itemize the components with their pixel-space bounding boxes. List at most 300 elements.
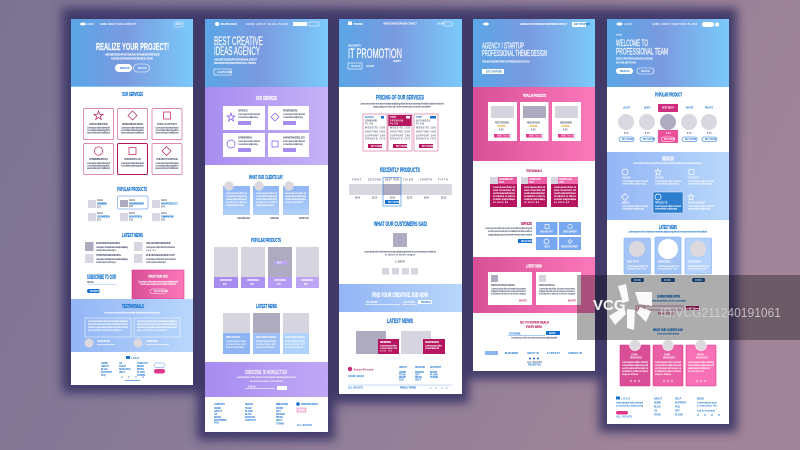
hero banner: IT PROMOTION — [348, 45, 402, 61]
testimonial cards: et dolore magna aliqua — [524, 198, 546, 201]
services section: MEDIA — [622, 202, 630, 204]
hero banner: WEBSITE DESIGN PROFESSIONAL IS BEST — [214, 58, 257, 62]
product comparison table: $170 — [407, 198, 413, 200]
services section: DESIGN — [655, 178, 664, 180]
find job strip: FIND YOUR CREATIVE JOB NOW — [372, 293, 428, 299]
service card text: Lorem ipsum dolor sit amet sed — [87, 126, 111, 130]
customer testimonial: J. SMITH — [395, 262, 405, 264]
popular products section: ★★★★★ — [561, 124, 570, 128]
product comparison table: BEST ITEM — [385, 180, 399, 182]
client cards: sed do eiusmod tempor — [256, 198, 277, 201]
services section: Lorem ipsum dolor sit amet consectetur adipiscing elit sed do eiusmod tempor — [633, 162, 702, 165]
pricing cards: HOSTING 5GB — [365, 132, 385, 134]
footer: BLOG NEWS — [505, 353, 518, 355]
customer testimonial — [364, 233, 436, 274]
latest news subtitle: Lorem ipsum dolor sit amet consectetur adipiscing elit sed do eiusmod tempor incididunt — [628, 230, 707, 234]
page 3: it promotion — [339, 19, 462, 394]
testimonial cards: ut enim ad — [524, 201, 540, 204]
footer: HOME — [214, 408, 221, 410]
subscribe block — [87, 275, 117, 293]
newsletter call to action: GO TO SUPER DEALS — [520, 320, 549, 324]
subscribe block: Lorem ipsum dolor sit amet consectetur — [650, 300, 686, 302]
footer: HELP — [276, 420, 283, 422]
services section: consectetur adipiscing — [622, 208, 645, 210]
testimonial cards: CEO — [529, 182, 534, 184]
hero banner: LEARN MORE — [217, 71, 233, 74]
hero banner: REALIZE YOUR PROJECT! — [96, 41, 169, 53]
product comparison table: FIFTH — [438, 180, 448, 182]
footer: NEWS — [214, 417, 221, 419]
footer: TEAM — [119, 365, 126, 368]
client cards: Lorem ipsum dolor sit — [256, 192, 277, 195]
client cards: Lorem ipsum dolor sit amet — [688, 361, 714, 364]
news cards: NEW DESIGN — [688, 262, 701, 264]
footer: consectetur elit — [697, 404, 717, 408]
services section — [607, 152, 729, 220]
footer: NEWS — [137, 366, 144, 368]
hero banner: HOME ABOUT WORK FEATURES PRICING CONTACT — [520, 23, 568, 26]
service card text: eiusmod tempor incididunt ut — [156, 167, 179, 170]
news cards: NEW POST — [627, 262, 640, 264]
client cards: consectetur adipiscing — [256, 195, 278, 198]
heading: what our clients say: WHAT OUR CLIENTS SAY — [249, 175, 283, 181]
product circles — [618, 104, 717, 143]
pink offer box: sed do eiusmod tempor incididunt ut labore — [140, 283, 177, 286]
services block: HELP — [544, 246, 550, 248]
footer: ABOUT — [399, 366, 408, 369]
latest news section: NEW ARTICLE — [539, 283, 555, 287]
hero banner: SIGN IN — [138, 68, 147, 70]
hero banner: IDEAS AGENCY — [214, 46, 260, 58]
footer: COMPANY — [214, 403, 225, 406]
product comparison table: SECOND — [368, 180, 381, 182]
product circles: $ 15 — [687, 133, 692, 135]
product columns: WEB DESIGN — [274, 280, 286, 282]
client cards: consectetur adipiscing elit — [622, 364, 648, 367]
popular products section: $ 30 — [563, 130, 568, 132]
news cards: NEW DESIGN — [425, 340, 439, 344]
heading: popular product: POPULAR PRODUCT — [655, 92, 682, 98]
footer: ABOUT — [654, 398, 663, 400]
latest news list: sed do eiusmod tempor — [96, 261, 116, 264]
services section: consectetur adipiscing — [688, 182, 713, 186]
find job strip: KEYWORD — [366, 302, 378, 304]
footer: PARTNERS — [214, 419, 227, 422]
testimonial cards: Lorem ipsum dolor sit — [493, 186, 515, 189]
news cards: NEW WEB DESIGN — [256, 337, 276, 339]
product comparison table: $150 — [390, 198, 396, 200]
footer: FAQ — [675, 406, 680, 408]
service card text: Lorem ipsum dolor sit amet sed — [156, 162, 179, 165]
services section: Lorem ipsum dolor sit amet — [688, 205, 714, 208]
testimonial cards: et dolore magna aliqua — [554, 198, 577, 201]
client cards: sed do eiusmod tempor ut — [655, 367, 681, 370]
testimonial cards: JANE DOE — [529, 177, 541, 181]
popular product list: NEW PRODUCT 1 — [161, 202, 178, 206]
popular product list: $45 — [161, 206, 166, 208]
pricing cards — [363, 114, 438, 151]
pink offer box: READ MORE — [154, 290, 169, 293]
testimonial cards — [490, 177, 578, 207]
client cards: magna aliqua — [655, 374, 672, 376]
hero banner: LOGO — [87, 24, 94, 26]
testimonial cards: CEO — [499, 182, 504, 184]
service card text: consectetur adipiscing elit do — [156, 164, 179, 168]
footer: US — [119, 363, 123, 365]
footer: NEWS — [399, 377, 406, 379]
news cards: Lorem ipsum dolor sit — [688, 265, 709, 268]
latest news list: BOARDING NEW DESIGN — [96, 241, 120, 245]
latest news section: Lorem ipsum dolor sit amet consectetur — [539, 288, 575, 290]
news cards: sed do eiusmod — [256, 347, 275, 349]
testimonials section: elit sed do eiusmod tempor incididunt ut labore — [137, 323, 178, 326]
pricing cards: PREMIUM — [390, 120, 403, 122]
client cards: consectetur adipiscing — [226, 195, 248, 198]
news cards — [223, 313, 309, 354]
news cards: consectetur elit — [688, 268, 707, 270]
subscribe block — [636, 294, 699, 316]
latest news list: Lorem ipsum dolor sit amet consectetur adipiscing — [96, 246, 129, 249]
services block: DEVELOPMENT — [563, 232, 578, 234]
popular product list: SALE — [129, 212, 135, 215]
testimonial cards: sed do eiusmod tempor — [524, 192, 545, 195]
footer: Lorem ipsum dolor — [697, 402, 717, 404]
news cards: Lorem ipsum dolor — [256, 341, 276, 343]
product comparison table: $100 — [355, 198, 361, 200]
pricing cards: STANDARD — [365, 120, 377, 122]
product circles: LIGHT — [623, 108, 630, 110]
services section: OPTIMIZATION — [238, 136, 252, 140]
service card text: eiusmod tempor incididunt ut — [156, 132, 179, 134]
footer: CONTACT — [245, 419, 257, 422]
footer: ALL RIGHTS — [348, 386, 363, 390]
hero banner: ONLINE MONITORING OPTIMIZATION TOOLS — [482, 60, 530, 64]
footer: LOGIN [ SIGN ] — [348, 376, 364, 378]
testimonial cards: MARK LEE — [559, 177, 572, 181]
find job strip: LOCATION — [403, 301, 415, 304]
latest news list: Lorem ipsum dolor sit amet consectetur adipiscing — [96, 258, 129, 261]
newsletter call to action: SEND — [549, 333, 556, 335]
clients subtitle: Lorem ipsum dolor sit amet — [657, 332, 679, 336]
product circles: $ 15 — [645, 133, 650, 135]
footer: HOME — [399, 372, 406, 374]
services section: Lorem ipsum dolor sit amet — [655, 205, 681, 208]
subscribe block: SEND — [689, 308, 696, 310]
newsletter call to action — [508, 320, 560, 340]
client cards: magna aliqua — [622, 374, 639, 376]
services section: Lorem ipsum dolor sit amet — [238, 113, 260, 116]
customer testimonial: ut labore et dolore magna — [385, 254, 416, 256]
popular products section — [473, 87, 595, 161]
page 4: agency startup — [473, 19, 595, 371]
testimonials section: JANE DOE — [146, 339, 158, 343]
news cards: Lorem ipsum dolor sit — [627, 265, 648, 268]
footer: BLOG — [654, 406, 661, 408]
footer: CONTACT US — [568, 352, 582, 355]
footer: HOME — [654, 402, 661, 404]
hero banner: LOGO — [624, 24, 632, 26]
latest news list: Lorem ipsum dolor sit amet consectetur — [146, 258, 176, 261]
footer: ART — [675, 410, 680, 412]
pricing cards: BUY NOW — [396, 146, 408, 148]
testimonials section: quis nostrud exercitation — [137, 329, 168, 332]
latest news section — [473, 257, 595, 313]
testimonial cards: amet consectetur elit — [493, 189, 515, 192]
footer: PLANS — [137, 371, 145, 374]
testimonials section: JOHN MILLER — [97, 339, 111, 343]
heading: popular products: POPULAR PRODUCTS — [117, 187, 147, 193]
newsletter call to action: Lorem ipsum dolor sit amet consectetur adipiscing elit — [511, 336, 557, 340]
footer: HELP — [675, 398, 682, 400]
pricing cards: SUPPORT 24H — [416, 134, 436, 138]
services section: Lorem ipsum dolor sit amet — [622, 205, 648, 208]
service card text: Lorem ipsum dolor sit amet sed — [121, 126, 145, 130]
services block: sed do eiusmod tempor incididunt ut labore dolore — [488, 230, 533, 233]
product columns: WEB DESIGN — [301, 280, 313, 282]
pricing cards: PLAN — [365, 122, 373, 126]
services section: MARKETING RESULTS — [283, 136, 305, 140]
client cards: consectetur adipiscing elit — [688, 364, 714, 367]
footer: PLANS — [430, 374, 438, 376]
service card text: FREE SUPPORT — [157, 122, 177, 126]
pricing cards: HOSTING 5GB — [416, 132, 436, 134]
subscribe block: PRIVACY POLICY — [658, 312, 674, 316]
page 2: best creative ideas agency — [205, 19, 328, 432]
hero banner: CREATIVE IDEAS — [220, 23, 237, 26]
service card text: OPTIMIZATION TOOLS — [89, 157, 108, 161]
subscribe block: SUBSCRIBE NOW — [657, 294, 680, 298]
news cards — [624, 237, 712, 282]
service card text: consectetur adipiscing elit do — [87, 164, 111, 168]
services section — [205, 87, 328, 165]
find job strip — [339, 284, 462, 312]
product comparison table: BUY NOW — [388, 202, 400, 204]
service card text: OPEN MINDTIME — [89, 122, 108, 126]
client cards: Lorem ipsum dolor sit — [285, 192, 306, 195]
popular product list: $25 — [97, 206, 102, 208]
testimonial cards: incididunt ut labore — [493, 195, 516, 198]
product circles: BODY — [644, 108, 651, 110]
news cards — [356, 331, 445, 354]
news cards: consectetur elit — [226, 343, 246, 346]
subscribe block: NEWS — [87, 282, 94, 284]
services section: SERVICE — [238, 108, 248, 112]
pricing cards: WEBSITE 1GB — [390, 128, 410, 130]
heading: pricing: PRICING OF OUR SERVICES — [376, 96, 424, 102]
hero banner: GET STARTED — [486, 70, 502, 74]
footer: TERMS — [276, 424, 285, 426]
news cards: consectetur elit — [256, 343, 276, 346]
testimonials section: TESTIMONIALS — [122, 304, 144, 310]
testimonial cards: amet consectetur elit — [524, 189, 545, 192]
product comparison table: FIRST — [352, 180, 362, 182]
popular product list: $25 — [97, 220, 102, 222]
testimonial cards: Lorem ipsum dolor sit — [524, 186, 545, 189]
popular product list — [88, 196, 178, 222]
client cards: JANE — [664, 354, 671, 356]
service card text: consectetur adipiscing elit do — [87, 129, 111, 132]
footer: TERMS — [137, 375, 146, 377]
news cards: Lorem ipsum dolor — [226, 341, 246, 343]
footer: ABOUT — [101, 365, 110, 368]
latest news section: adipiscing elit sed do eiusmod tempor — [539, 290, 575, 293]
testimonials section: elit sed do eiusmod tempor incididunt ut labore — [88, 323, 129, 326]
subscribe strip — [205, 362, 328, 397]
hero banner: IT PROMO — [353, 24, 363, 26]
footer: TEAM — [245, 407, 252, 410]
hero banner: SIGN — [176, 24, 182, 26]
news cards: consectetur elit — [380, 347, 397, 350]
footer: US — [214, 414, 218, 416]
pricing cards: BUY NOW — [422, 146, 434, 148]
hero banner — [607, 19, 729, 87]
popular product list: CLEAN DESIGN — [97, 214, 110, 218]
client cards: sed do eiusmod tempor — [285, 198, 306, 201]
popular products section: ADD TO CART — [497, 134, 513, 138]
footer — [214, 402, 318, 427]
pink offer box — [132, 270, 184, 299]
hero banner: LEARN — [366, 65, 374, 68]
news cards: WEB DESIGN — [226, 337, 240, 339]
pricing cards: WEBSITE 1GB — [416, 128, 436, 130]
testimonials section: Lorem ipsum dolor sit amet consectetur adipiscing elit sed do eiusmod — [104, 312, 161, 314]
heading: latest news: LATEST NEWS — [122, 233, 143, 239]
product comparison table — [349, 178, 452, 206]
footer — [348, 366, 452, 390]
services block: Lorem ipsum dolor sit amet consectetur adipiscing elit — [485, 227, 532, 230]
services section: consectetur adipiscing — [283, 143, 304, 146]
client cards: ut labore et dolore — [226, 201, 248, 204]
heading: what our customers said: WHAT OUR CUSTOMERS SAID — [374, 222, 427, 228]
heading: latest news: LATEST NEWS — [256, 304, 277, 310]
heading: recently products: RECENTLY PRODUCTS — [380, 168, 420, 174]
latest news section: Lorem ipsum dolor sit amet consectetur — [491, 288, 526, 290]
services block: ONLINE ART — [540, 230, 554, 234]
news cards: Lorem ipsum dolor — [425, 346, 442, 348]
footer: HOME — [101, 363, 108, 365]
heading: latest news: LATEST NEWS — [387, 319, 413, 325]
product columns: BUY — [277, 263, 282, 265]
footer: PRICE — [137, 369, 144, 371]
watermark id: ID:VCG211240191061 — [660, 305, 781, 320]
footer: LOGO — [131, 358, 139, 360]
hero banner — [473, 19, 595, 87]
footer: BLOG — [245, 414, 252, 416]
popular product list: $45 — [161, 218, 166, 222]
popular product list: NEW WEB DESIGN — [129, 202, 144, 206]
subscribe block: E-MAIL — [638, 307, 647, 310]
service card text: Lorem ipsum dolor sit amet sed — [121, 162, 145, 165]
service card text: consectetur adipiscing elit do — [121, 129, 145, 132]
footer: WORK — [276, 408, 284, 410]
popular product list: WEB DESIGN — [97, 202, 107, 206]
popular products section: FIRST DESIGN — [495, 122, 509, 124]
client cards: MANAGER — [663, 356, 675, 360]
product circles: BUY NOW — [622, 139, 634, 141]
client cards: MARK — [697, 354, 704, 356]
testimonial cards: incididunt ut labore — [554, 195, 577, 198]
hero banner: AGENCY — [393, 60, 401, 63]
service card text: eiusmod tempor incididunt ut — [121, 132, 144, 134]
popular products section: ADD TO CART — [561, 134, 577, 138]
hero banner: MODERN PROMOTION SOLUTIONS — [214, 61, 256, 65]
news cards: MORE — [634, 280, 641, 282]
product columns — [214, 247, 319, 288]
product comparison table: $190 — [424, 198, 430, 200]
services block: READ MORE — [521, 240, 536, 243]
footer: TERMS — [430, 377, 439, 379]
product circles: BUY NOW — [643, 139, 655, 141]
news cards: consectetur elit — [285, 343, 305, 346]
pricing intro text: magna aliqua ut enim ad minim veniam quis nostrud exercitation — [373, 106, 432, 108]
popular product list: NEW DESIGN — [129, 214, 142, 218]
hero banner: SIGN IN — [641, 71, 650, 73]
testimonial cards: amet consectetur elit — [554, 189, 576, 192]
watermark logo: VCG — [593, 297, 626, 314]
service card text: Lorem ipsum dolor sit amet sed — [87, 162, 111, 165]
footer: HELP — [415, 380, 422, 382]
product comparison table: $210 — [441, 198, 447, 200]
latest news section: MORE — [519, 300, 527, 302]
client cards: MANAGER — [630, 356, 642, 360]
latest news list: Lorem ipsum dolor sit amet consectetur — [146, 246, 175, 249]
news cards: sed do eiusmod — [226, 347, 245, 349]
testimonial cards: incididunt ut labore — [524, 195, 546, 198]
product circles: BEST BODY — [662, 108, 674, 110]
services section: Lorem ipsum dolor sit amet — [622, 180, 648, 183]
footer: TEAM — [399, 374, 406, 376]
popular product list: SALE — [161, 212, 167, 215]
pricing cards: WEBSITE 1GB — [365, 128, 385, 130]
footer: SUPPORT — [430, 367, 442, 369]
footer: HELP — [119, 372, 126, 374]
product circles: BUY NOW — [705, 139, 717, 141]
footer — [616, 396, 720, 418]
pricing cards: DOMAIN YES — [365, 138, 385, 140]
product columns: WEB DESIGN — [220, 280, 232, 282]
services section: DEVELOPMENT — [688, 202, 706, 204]
hero banner: SIGN UP — [351, 66, 361, 68]
services section: consectetur adipiscing — [238, 116, 259, 119]
product columns: $40 — [277, 283, 282, 286]
page 1: realize your project — [71, 19, 193, 385]
popular products section: $ 30 — [499, 130, 504, 132]
client cards: JOHN MILLER — [237, 218, 250, 220]
page 1: realize your project: SUBSCRIBE TO OUR — [87, 275, 116, 281]
footer — [101, 356, 165, 381]
footer: ABOUT US — [527, 352, 539, 355]
pricing cards: HOSTING 5GB — [390, 132, 410, 134]
services section: SUPPORT — [688, 178, 700, 180]
subscribe block: SUBSCRIBE — [90, 291, 104, 293]
service cards — [84, 108, 182, 174]
hero banner: HOME ABOUT SERVICES PLANS — [652, 23, 697, 26]
latest news list — [85, 241, 176, 264]
product circles: $ 20 — [666, 133, 671, 135]
footer: WORK — [430, 372, 438, 374]
testimonials section: et dolore magna aliqua ut enim ad minim veniam — [137, 326, 177, 329]
testimonials section — [71, 299, 193, 352]
client cards: MANAGER — [696, 356, 708, 360]
popular products section: ADD TO CART — [529, 134, 545, 138]
footer: RESERVED — [528, 364, 541, 366]
heading: latest news: LATEST NEWS — [659, 225, 677, 231]
popular product list: $35 — [129, 206, 134, 208]
services block — [485, 221, 581, 250]
hero banner: PROFESSIONAL TEAM — [616, 46, 668, 58]
services block: magna aliqua ut enim ad minim veniam quis nostrud — [488, 234, 533, 236]
footer: CREATIVE IDEAS — [301, 403, 318, 406]
